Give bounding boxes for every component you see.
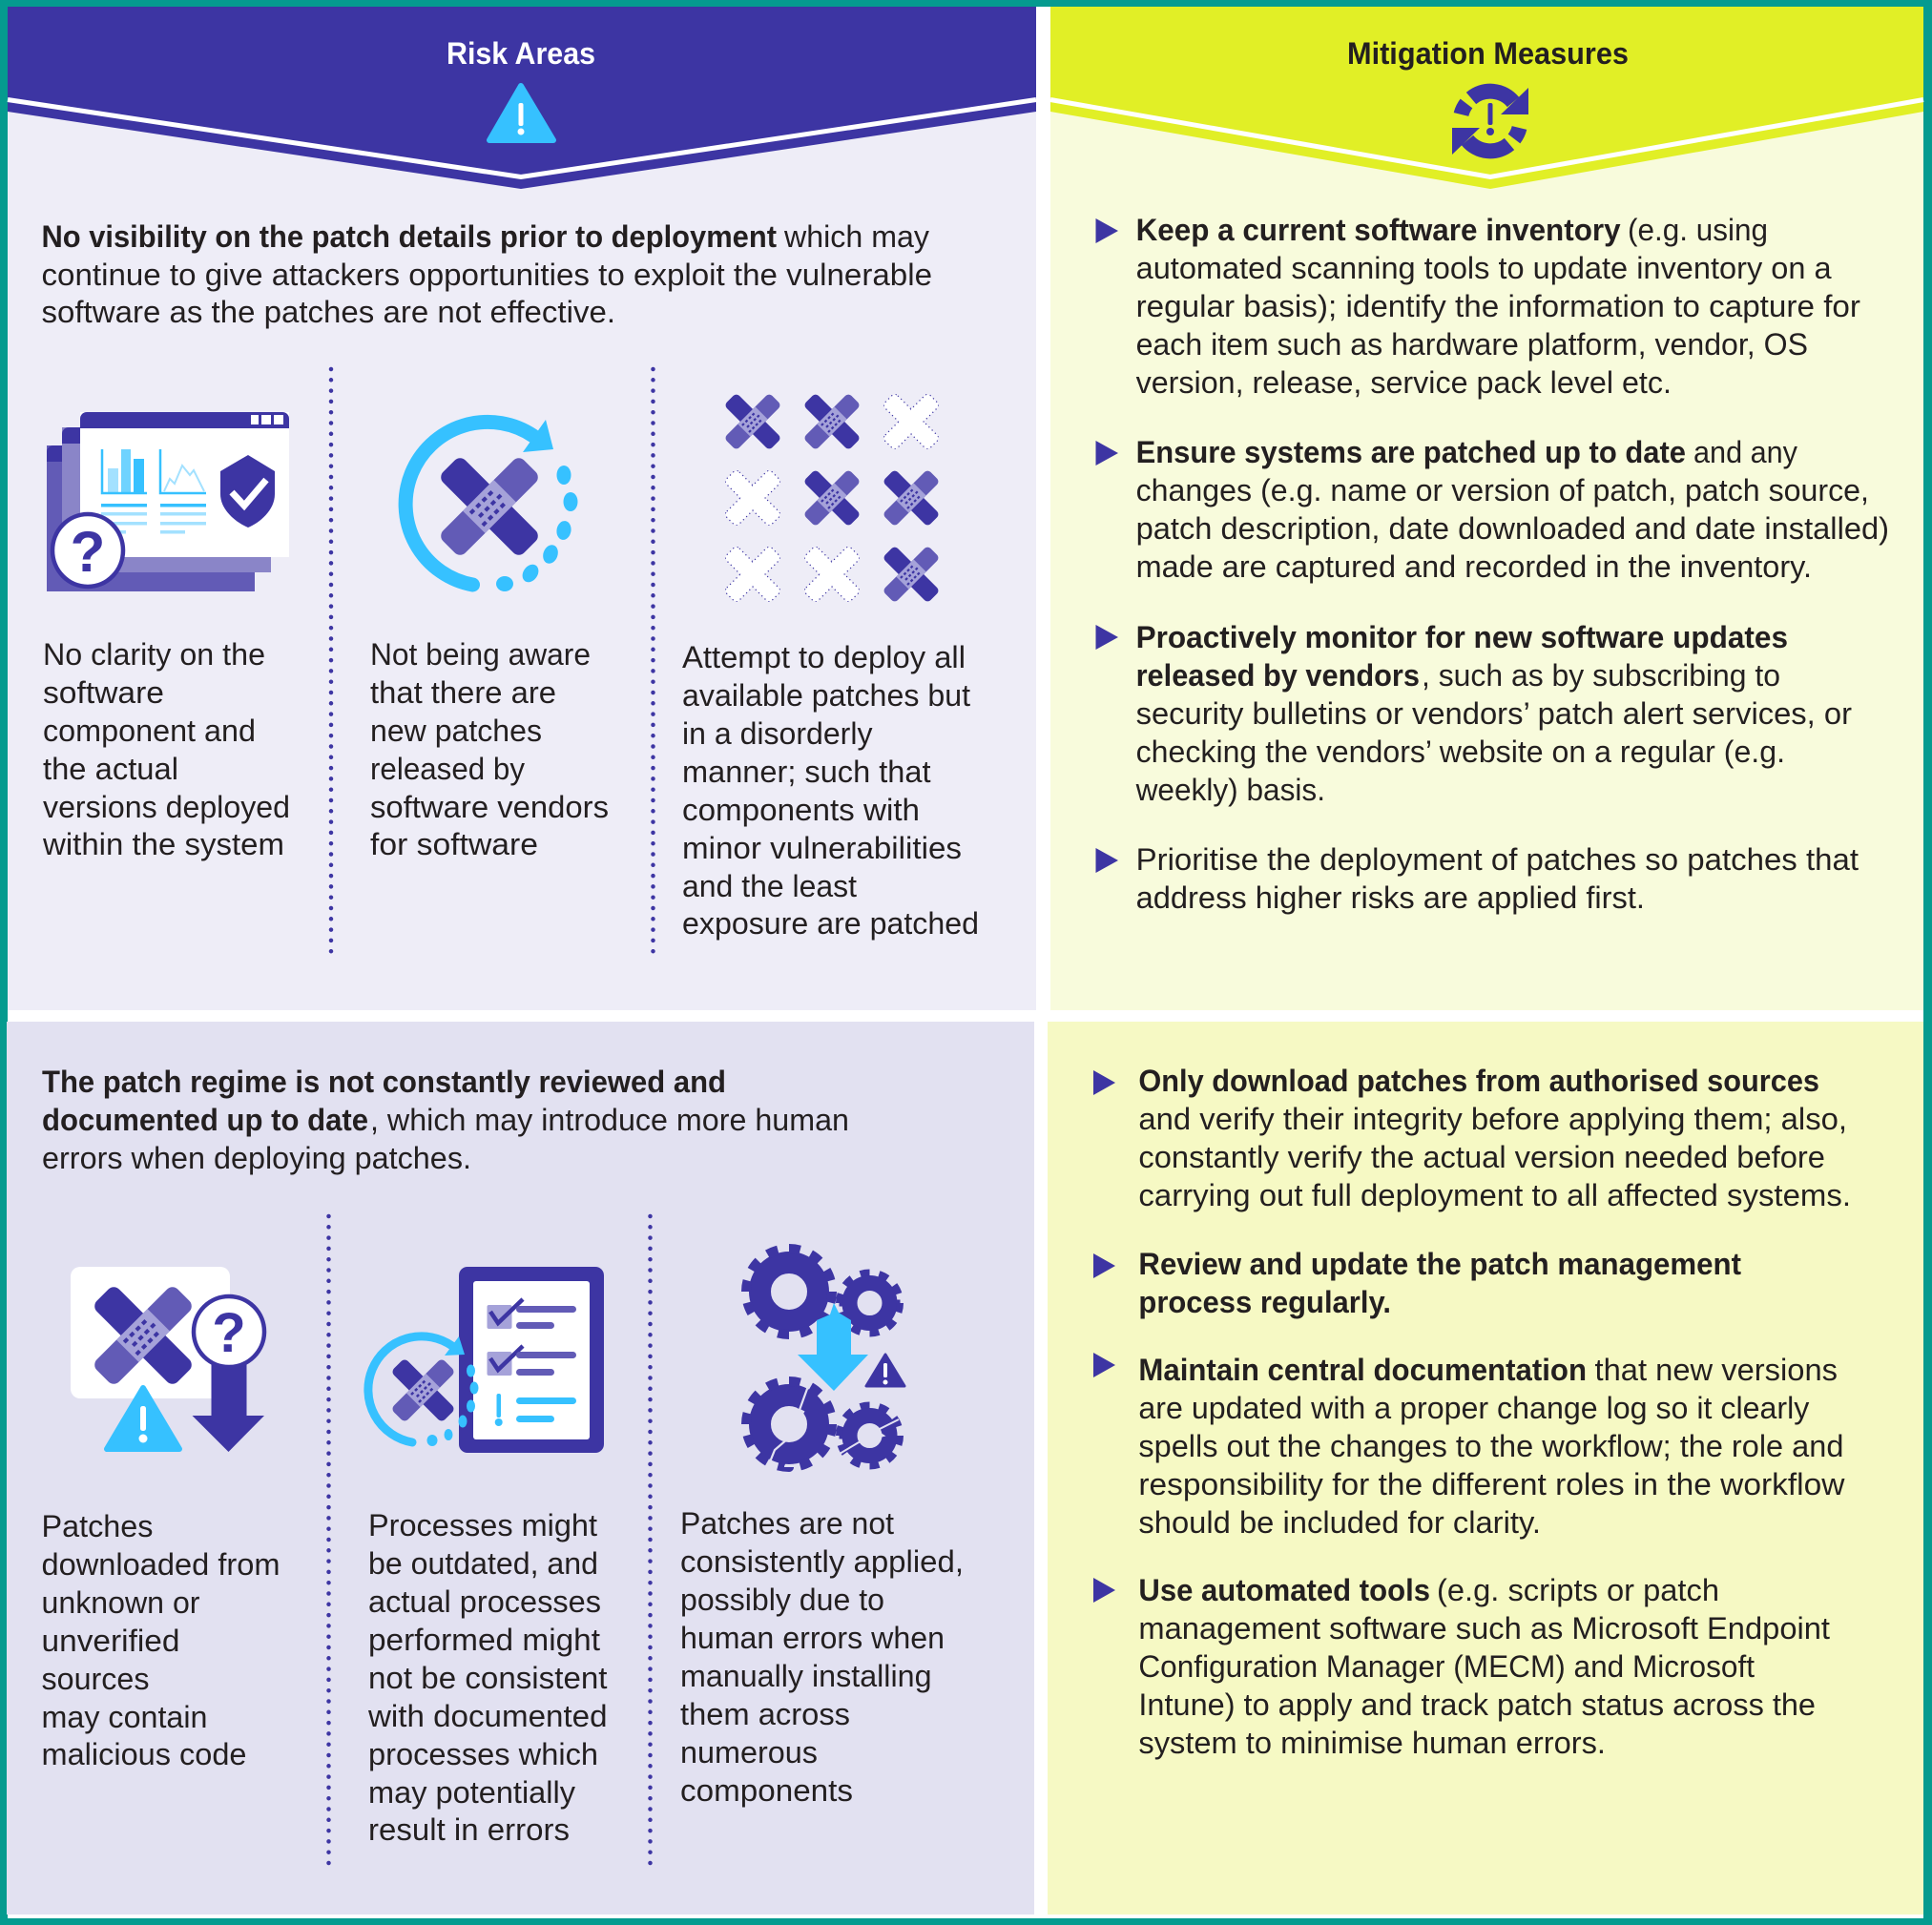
text: patches downloaded: downloaded from — [42, 1547, 280, 1582]
text: attempt to deploy: Attempt to deploy all — [682, 640, 966, 674]
bullet: proactively monitor — [1095, 620, 1852, 807]
bullet: ensure systems patched: changes (e.g. name or version of patch, patch source, — [1136, 473, 1869, 507]
intro text: patch regime: errors when deploying patches. — [42, 1141, 471, 1175]
text: attempt to deploy: and the least — [682, 869, 857, 903]
bullet: keep inventory: version, release, service pack level etc. — [1136, 365, 1672, 400]
icon: checklist with patch — [368, 1267, 604, 1453]
icon: warning triangle — [489, 86, 553, 140]
bullet: maintain central documentation: spells out the changes to the workflow; the role and — [1138, 1429, 1843, 1463]
bullet: keep inventory: regular basis); identify the information to capture for — [1136, 289, 1860, 323]
text: not being aware: for software — [370, 827, 538, 861]
bullet: keep inventory: automated scanning tools to update inventory on a — [1136, 251, 1832, 285]
text: processes might be outdated: Processes might — [368, 1508, 597, 1542]
bullet: use automated tools: Configuration Manager (MECM) and Microsoft — [1138, 1649, 1755, 1684]
text: patches downloaded: malicious code — [42, 1737, 246, 1771]
bullet: review and update: Review and update the patch management — [1138, 1247, 1741, 1281]
bullet: use automated tools: system to minimise human errors. — [1138, 1726, 1606, 1760]
intro text: patch regime: The patch regime is not constantly reviewed and — [42, 1065, 726, 1099]
text: processes might be outdated: not be consistent — [368, 1661, 608, 1695]
bullet: prioritise deployment — [1095, 842, 1859, 915]
text: attempt to deploy — [682, 640, 979, 941]
bullet: ensure systems patched: and any — [1693, 435, 1797, 469]
text: patches downloaded: may contain — [42, 1700, 208, 1734]
intro text: no visibility — [42, 219, 932, 329]
panel: risk areas, patch regime — [7, 1022, 1034, 1915]
text: patches downloaded: Patches — [42, 1509, 153, 1543]
icon: software windows with question mark — [47, 412, 289, 591]
bullet: proactively monitor: released by vendors — [1136, 658, 1420, 693]
bullet: proactively monitor: checking the vendors’ website on a regular (e.g. — [1136, 735, 1785, 769]
text: attempt to deploy: exposure are patched — [682, 906, 979, 941]
bullet: review and update: process regularly. — [1138, 1285, 1391, 1319]
text: patches downloaded: sources — [42, 1662, 149, 1696]
text: not being aware: released by — [370, 752, 525, 786]
icon: circular arrows with exclamation — [1452, 88, 1528, 155]
text: patches not consistently applied: them across — [680, 1697, 850, 1731]
text: not being aware — [370, 637, 609, 861]
bullet: keep inventory: Keep a current software inventory — [1136, 213, 1621, 247]
text: not being aware: new patches — [370, 714, 542, 748]
bullet: only download authorised: Only download patches from authorised sources — [1138, 1064, 1819, 1098]
text: no clarity: component and — [43, 714, 256, 748]
text: patches not consistently applied: numerous — [680, 1735, 818, 1770]
bullet: ensure systems patched: Ensure systems are patched up to date — [1136, 435, 1686, 469]
text: patches not consistently applied: manually installing — [680, 1659, 931, 1693]
bullet: use automated tools: Intune) to apply and track patch status across the — [1138, 1687, 1816, 1722]
bullet: use automated tools: Use automated tools — [1138, 1573, 1430, 1607]
text: no clarity: versions deployed — [43, 790, 290, 824]
panel: mitigation measures, top — [1050, 7, 1923, 1010]
text: patches not consistently applied: human errors when — [680, 1621, 945, 1655]
text: processes might be outdated: may potentially — [368, 1775, 575, 1810]
text: no clarity: within the system — [42, 827, 284, 861]
panel: mitigation measures, bottom — [1048, 1022, 1923, 1915]
text: processes might be outdated: with documented — [367, 1699, 607, 1733]
text: not being aware: Not being aware — [370, 637, 591, 672]
bullet: use automated tools — [1093, 1573, 1830, 1760]
icon: patch with warning and question mark — [71, 1267, 264, 1452]
bullet: keep inventory: (e.g. using — [1628, 213, 1768, 247]
bullet: proactively monitor: weekly) basis. — [1135, 773, 1325, 807]
intro text: no visibility: No visibility on the patch details prior to deployment — [42, 219, 777, 254]
text: no clarity: No clarity on the — [43, 637, 265, 672]
text: processes might be outdated: processes which — [368, 1737, 598, 1771]
bullet: only download authorised: carrying out full deployment to all affected systems. — [1138, 1178, 1851, 1212]
text: attempt to deploy: available patches but — [682, 678, 970, 713]
bullet: only download authorised — [1093, 1064, 1851, 1212]
intro text: patch regime — [42, 1065, 849, 1175]
icon: software windows with question mark: ? — [71, 520, 105, 584]
bullet: prioritise deployment: address higher risks are applied first. — [1136, 880, 1645, 915]
text: patches downloaded: unknown or — [42, 1585, 200, 1620]
bullet: maintain central documentation: should be included for clarity. — [1138, 1505, 1541, 1540]
icon: patch with circular arrow — [405, 420, 578, 591]
panel: risk areas, no visibility — [8, 7, 1036, 1010]
text: patches downloaded — [42, 1509, 280, 1771]
bullet: keep inventory: each item such as hardware platform, vendor, OS — [1136, 327, 1808, 362]
text: patches not consistently applied: possibly due to — [680, 1583, 884, 1617]
text: no clarity: the actual — [43, 752, 178, 786]
bullet: ensure systems patched: made are captured and recorded in the inventory. — [1136, 549, 1812, 584]
heading: mitigation measures: Mitigation Measures — [1347, 36, 1629, 71]
text: no clarity: software — [43, 675, 164, 710]
text: not being aware: software vendors — [370, 790, 609, 824]
text: processes might be outdated — [367, 1508, 608, 1847]
bullet: ensure systems patched: patch description, date downloaded and date installed) — [1136, 511, 1889, 546]
bullet: maintain central documentation: responsibility for the different roles in the workflow — [1138, 1467, 1845, 1501]
text: patches not consistently applied: Patches are not — [680, 1506, 894, 1541]
text: processes might be outdated: actual processes — [368, 1584, 601, 1619]
text: processes might be outdated: result in errors — [368, 1812, 570, 1847]
text: processes might be outdated: be outdated, and — [368, 1546, 598, 1581]
bullet: maintain central documentation: that new versions — [1595, 1353, 1838, 1387]
text: not being aware: that there are — [370, 675, 556, 710]
bullet: proactively monitor: Proactively monitor for new software updates — [1136, 620, 1788, 654]
intro text: no visibility: software as the patches are not effective. — [42, 295, 615, 329]
header: risk areas banner — [8, 7, 1036, 189]
text: patches not consistently applied — [680, 1506, 964, 1808]
bullet: keep inventory — [1095, 213, 1860, 400]
bullet: proactively monitor: security bulletins or vendors’ patch alert services, or — [1136, 696, 1852, 731]
text: patches not consistently applied: components — [680, 1773, 853, 1808]
text: processes might be outdated: performed might — [368, 1623, 600, 1657]
heading: risk areas: Risk Areas — [447, 36, 595, 71]
bullet: use automated tools: management software such as Microsoft Endpoint — [1138, 1611, 1830, 1646]
text: attempt to deploy: manner; such that — [682, 755, 931, 789]
intro text: patch regime: , which may introduce more human — [370, 1103, 849, 1137]
bullet: only download authorised: constantly verify the actual version needed before — [1138, 1140, 1825, 1174]
bullet: maintain central documentation: Maintain central documentation — [1138, 1353, 1587, 1387]
bullet: only download authorised: and verify their integrity before applying them; also, — [1138, 1102, 1847, 1136]
intro text: patch regime: documented up to date — [42, 1103, 368, 1137]
icon: grid of patches — [724, 393, 940, 603]
bullet: use automated tools: (e.g. scripts or patch — [1437, 1573, 1719, 1607]
bullet: maintain central documentation — [1093, 1353, 1845, 1540]
bullet: maintain central documentation: are updated with a proper change log so it clearly — [1138, 1391, 1809, 1425]
icon: patch with warning and question mark: ? — [212, 1302, 246, 1364]
bullet: ensure systems patched — [1095, 435, 1889, 584]
bullet: proactively monitor: , such as by subscribing to — [1422, 658, 1780, 693]
header: mitigation measures banner — [1050, 7, 1923, 189]
text: attempt to deploy: components with — [682, 793, 920, 827]
intro text: no visibility: which may — [783, 219, 929, 254]
text: patches downloaded: unverified — [42, 1624, 179, 1658]
intro text: no visibility: continue to give attackers opportunities to exploit the vulnerable — [42, 258, 932, 292]
text: attempt to deploy: minor vulnerabilities — [682, 831, 962, 865]
text: patches not consistently applied: consistently applied, — [680, 1544, 964, 1579]
icon: gears with down arrow and warning — [746, 1249, 904, 1469]
bullet: review and update — [1093, 1247, 1741, 1319]
text: attempt to deploy: in a disorderly — [682, 716, 872, 751]
text: no clarity — [42, 637, 290, 861]
bullet: prioritise deployment: Prioritise the deployment of patches so patches that — [1136, 842, 1859, 877]
